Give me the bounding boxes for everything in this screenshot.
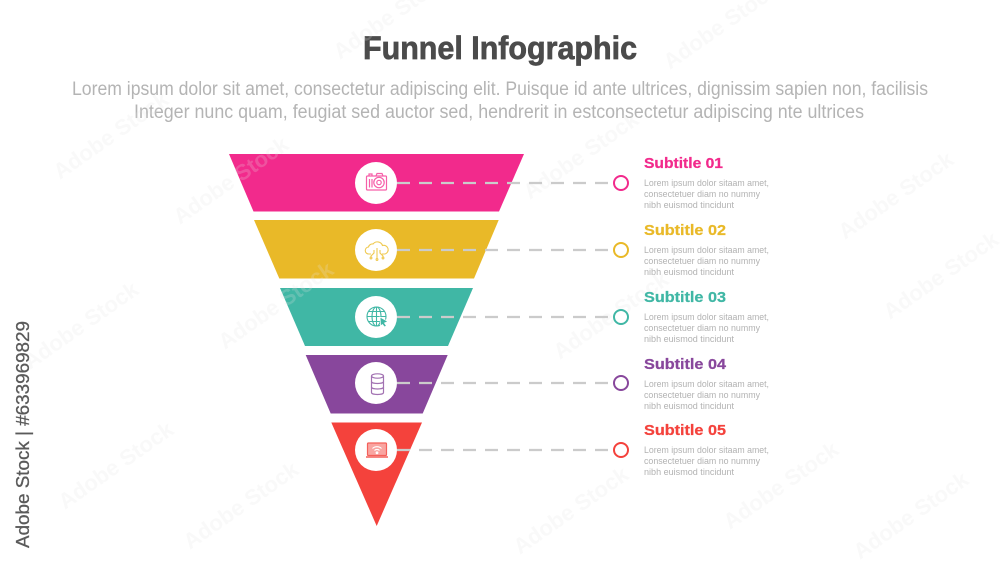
watermark: Adobe Stock bbox=[49, 86, 174, 184]
text block 3: nibh euismod tincidunt bbox=[644, 334, 734, 344]
marker 1 bbox=[614, 176, 628, 190]
text block 1: Lorem ipsum dolor sitaam amet, bbox=[644, 178, 769, 188]
text block 1: Subtitle 01 bbox=[644, 155, 723, 172]
watermark: Adobe Stock bbox=[169, 131, 294, 229]
text block 5: consectetuer diam no nummy bbox=[644, 456, 760, 466]
marker 5 bbox=[614, 443, 628, 457]
marker 2 bbox=[614, 243, 628, 257]
watermark: Adobe Stock bbox=[214, 256, 339, 354]
subtitle text: Integer nunc quam, feugiat sed auctor sed, hendrerit in estconsectetur adipiscing nte ultrices bbox=[134, 102, 864, 123]
text block 4 bbox=[644, 356, 769, 411]
text block 3: Lorem ipsum dolor sitaam amet, bbox=[644, 312, 769, 322]
connector lines bbox=[397, 183, 608, 450]
watermark: Adobe Stock bbox=[509, 461, 634, 559]
watermark: Adobe Stock bbox=[549, 266, 674, 364]
icon badge: globe with cursor bbox=[355, 296, 397, 338]
text block 4: Lorem ipsum dolor sitaam amet, bbox=[644, 379, 769, 389]
text block 1: consectetuer diam no nummy bbox=[644, 189, 760, 199]
stock id label: Adobe Stock | #633969829 bbox=[13, 321, 33, 548]
text block 2: Lorem ipsum dolor sitaam amet, bbox=[644, 245, 769, 255]
funnel segment 4 bbox=[306, 355, 448, 414]
text block 1 bbox=[644, 155, 769, 210]
text block 2: Subtitle 02 bbox=[644, 222, 726, 239]
watermark: Adobe Stock bbox=[54, 416, 179, 514]
watermark: Adobe Stock bbox=[879, 226, 1000, 324]
text block 2: nibh euismod tincidunt bbox=[644, 267, 734, 277]
subtitle text bbox=[72, 79, 928, 123]
marker 4 bbox=[614, 376, 628, 390]
watermark: Adobe Stock bbox=[719, 436, 844, 534]
icon badge: camera bbox=[355, 162, 397, 204]
text block 5 bbox=[644, 422, 769, 477]
text block 4: nibh euismod tincidunt bbox=[644, 401, 734, 411]
icon badge: laptop with wifi bbox=[355, 429, 397, 471]
funnel segment 1 bbox=[229, 154, 524, 212]
text block 3: consectetuer diam no nummy bbox=[644, 323, 760, 333]
funnel bbox=[229, 154, 524, 526]
funnel segment 2 bbox=[254, 220, 499, 278]
title: Funnel Infographic bbox=[363, 30, 637, 66]
funnel segment 3 bbox=[280, 288, 473, 346]
watermark: Adobe Stock bbox=[179, 456, 304, 554]
watermark: Adobe Stock bbox=[849, 466, 974, 563]
text block 2 bbox=[644, 222, 769, 277]
text block 4: Subtitle 04 bbox=[644, 356, 727, 373]
icon badge: database bbox=[355, 362, 397, 404]
funnel segment 5 bbox=[331, 422, 422, 526]
text block 5: nibh euismod tincidunt bbox=[644, 467, 734, 477]
text block 3: Subtitle 03 bbox=[644, 289, 726, 306]
text block 1: nibh euismod tincidunt bbox=[644, 200, 734, 210]
subtitle text: Lorem ipsum dolor sit amet, consectetur adipiscing elit. Puisque id ante ultrices, dignissim sapien non, facilisis bbox=[72, 79, 928, 100]
marker 3 bbox=[614, 310, 628, 324]
text block 3 bbox=[644, 289, 769, 344]
text block 2: consectetuer diam no nummy bbox=[644, 256, 760, 266]
watermark: Adobe Stock bbox=[519, 106, 644, 204]
icon badge: cloud network bbox=[355, 229, 397, 271]
watermark: Adobe Stock bbox=[19, 276, 144, 374]
text block 4: consectetuer diam no nummy bbox=[644, 390, 760, 400]
text block 5: Lorem ipsum dolor sitaam amet, bbox=[644, 445, 769, 455]
text block 5: Subtitle 05 bbox=[644, 422, 726, 439]
watermark: Adobe Stock bbox=[834, 146, 959, 244]
